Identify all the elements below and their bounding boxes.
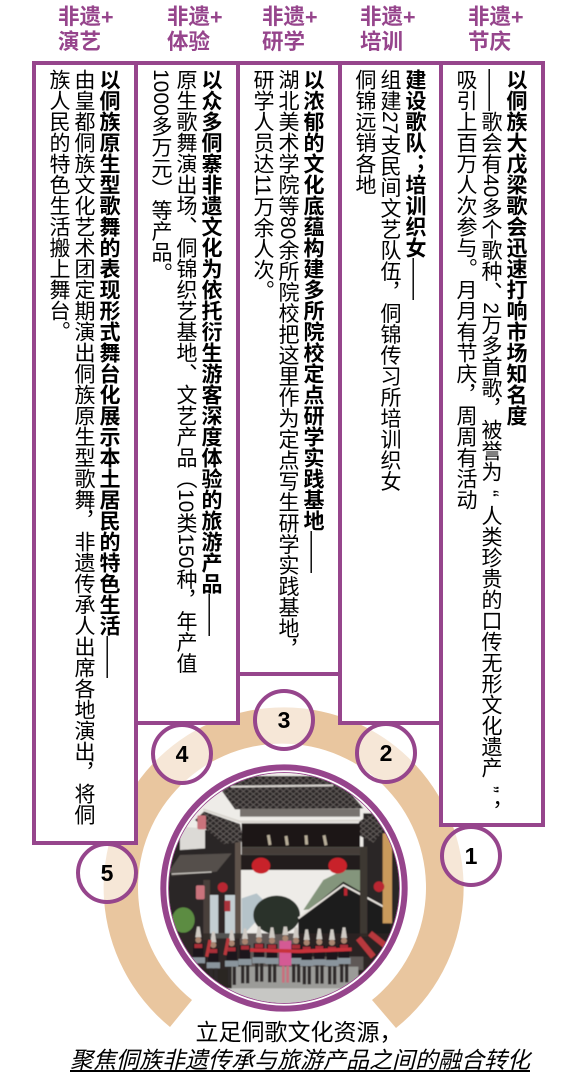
heading: 非遗+演艺 — [58, 5, 114, 54]
heading: 非遗+研学: 非遗+ — [262, 5, 318, 29]
icon: number circle 5: 5 — [101, 860, 114, 886]
panel: 培训 — [338, 61, 443, 725]
text: 体验 description: 1000多万元）等产品。 — [149, 69, 172, 284]
text: 演艺 description: 由皇都侗族文化艺术团定期演出侗族原生型歌舞，非遗传承人出席各地演出，将侗 — [72, 69, 95, 825]
text: 演艺 description: 族人民的特色生活搬上舞台。 — [47, 69, 70, 342]
heading: 非遗+体验 — [167, 5, 223, 54]
heading: 非遗+培训: 非遗+ — [360, 5, 416, 29]
panel: 节庆 — [439, 61, 545, 827]
heading: 非遗+研学: 研学 — [262, 30, 305, 54]
icon: number circle 2: 2 — [380, 740, 392, 766]
heading: 非遗+培训 — [360, 5, 416, 54]
icon: number circle 4: 4 — [176, 741, 189, 767]
text: 体验 description: 原生歌舞演出场、侗锦织艺基地、文艺产品（10类150种，年产值 — [174, 69, 197, 673]
text: 研学 description — [251, 69, 324, 659]
text: 培训 description: 侗锦远销各地 — [353, 69, 376, 195]
heading: 非遗+体验: 体验 — [167, 30, 210, 54]
text: 演艺 description: 以侗族原生型歌舞的表现形式舞台化展示本土居民的特色生活 —— — [97, 69, 120, 678]
heading: 非遗+培训: 培训 — [360, 30, 403, 54]
text: 演艺 description — [47, 69, 120, 825]
text: 研学 description: 以浓郁的文化底蕴构建多所院校定点研学实践基地 —— — [301, 69, 324, 573]
icon: number circle 4 — [153, 725, 211, 783]
heading: 非遗+研学 — [262, 5, 318, 54]
panel: 研学 — [236, 61, 342, 676]
heading: 非遗+演艺: 非遗+ — [58, 5, 114, 29]
text: 节庆 description: 以侗族大戊梁歌会迅速打响市场知名度 — [504, 69, 527, 426]
icon: number circle 1 — [442, 827, 500, 885]
text: 培训 description — [353, 69, 426, 491]
icon: number circle 3: 3 — [278, 707, 290, 733]
caption line 2: 聚焦侗族非遗传承与旅游产品之间的融合转化 — [70, 1047, 530, 1073]
text: 培训 description: 建设歌队；培训织女 —— — [403, 69, 426, 300]
panel: 演艺 — [32, 61, 138, 845]
heading: 非遗+体验: 非遗+ — [167, 5, 223, 29]
heading: 非遗+节庆 — [468, 5, 524, 54]
text: 培训 description: 组建27支民间文艺队伍，侗锦传习所培训织女 — [378, 69, 401, 491]
photo: Dong village gate with performers — [160, 767, 410, 1020]
text: 研学 description: 湖北美术学院等80余所院校把这里作为定点写生研学实践基地， — [276, 69, 299, 659]
text: 体验 description: 以众多侗寨非遗文化为依托衍生游客深度体验的旅游产品 —— — [199, 69, 222, 636]
text: 体验 description — [149, 69, 222, 673]
text: 节庆 description — [454, 69, 528, 822]
panel: 体验 — [134, 61, 240, 725]
text: 节庆 description: ——歌会有40多个歌种、2万多首歌，被誉为 “ 人类珍贵的口传无形文化遗产 ” ， — [479, 69, 502, 822]
icon: number circle 2 — [357, 724, 415, 782]
text: 研学 description: 研学人员达11万余人次。 — [251, 69, 274, 301]
icon: number circle 5 — [78, 844, 136, 902]
heading: 非遗+节庆: 节庆 — [468, 30, 511, 54]
circles and central photo — [76, 689, 502, 1012]
icon: number circle 1: 1 — [465, 843, 478, 869]
heading: 非遗+节庆: 非遗+ — [468, 5, 524, 29]
icon: number circle 3 — [255, 691, 313, 749]
text: 节庆 description: 吸引上百万人次参与。月月有节庆，周周有活动 — [454, 69, 477, 510]
caption line 1: 立足侗歌文化资源， — [196, 1019, 402, 1045]
heading: 非遗+演艺: 演艺 — [58, 30, 101, 54]
